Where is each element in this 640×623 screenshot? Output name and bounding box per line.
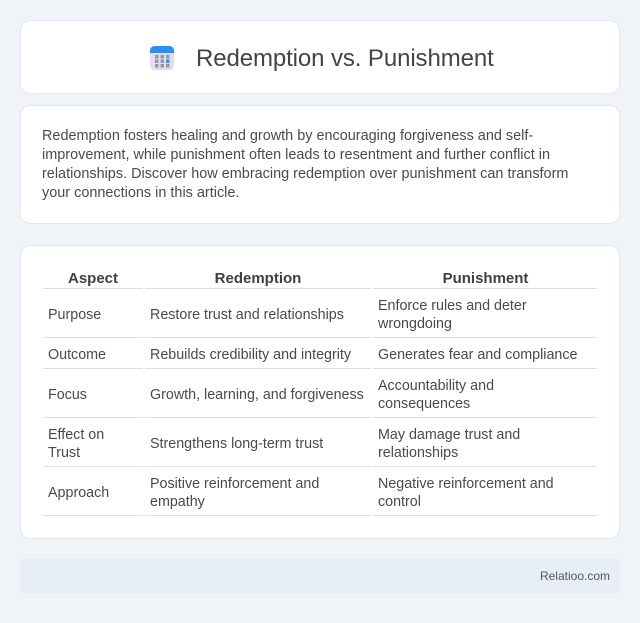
panel: description	[20, 105, 620, 224]
table row: Effect on Trust: Trust	[48, 445, 80, 461]
text block: introduction: improvement, while punishment often leads to resentment and further conflict in	[42, 147, 550, 163]
column heading: Aspect: Aspect	[68, 270, 118, 287]
footer credit: Relatioo.com	[540, 569, 610, 583]
table row: Purpose: Purpose	[48, 307, 101, 323]
table row: Focus: Growth, learning, and forgiveness	[150, 387, 364, 403]
table row: Effect on Trust	[43, 427, 597, 467]
table row: Purpose: Enforce rules and deter	[378, 298, 527, 314]
table row: Effect on Trust: Effect on	[48, 427, 104, 443]
table row: Effect on Trust: relationships	[378, 445, 458, 461]
table row: Focus	[43, 378, 597, 418]
table row: Approach: Approach	[48, 485, 109, 501]
text block: introduction: your connections in this article.	[42, 185, 239, 201]
table row: Purpose: Restore trust and relationships	[150, 307, 344, 323]
table row: Effect on Trust: Strengthens long-term trust	[150, 436, 323, 452]
table row: Focus: Focus	[48, 387, 87, 403]
footer	[20, 559, 620, 593]
table row: Approach: Positive reinforcement and	[150, 476, 319, 492]
table row: Approach: control	[378, 494, 421, 510]
table row: Approach	[43, 476, 597, 516]
column heading: Punishment: Punishment	[443, 270, 528, 287]
table row: Outcome: Outcome	[48, 347, 106, 363]
text block: introduction: Redemption fosters healing and growth by encouraging forgiveness and self-	[42, 128, 533, 144]
table row: Approach: empathy	[150, 494, 205, 510]
panel: header	[20, 20, 620, 94]
panel: comparison table	[20, 245, 620, 539]
table row: Approach: Negative reinforcement and	[378, 476, 554, 492]
text block: introduction: relationships. Discover how embracing redemption over punishment can transform	[42, 166, 568, 182]
table row: Outcome	[43, 347, 597, 369]
table row: Outcome: Rebuilds credibility and integrity	[150, 347, 351, 363]
column heading: Redemption: Redemption	[215, 270, 301, 287]
title: Redemption vs. Punishment	[196, 45, 494, 72]
table row: Outcome: Generates fear and compliance	[378, 347, 577, 363]
table header row	[43, 270, 597, 289]
table row: Focus: Accountability and	[378, 378, 494, 394]
table row: Purpose	[43, 298, 597, 338]
table row: Purpose: wrongdoing	[378, 316, 452, 332]
table row: Effect on Trust: May damage trust and	[378, 427, 520, 443]
icon: calendar	[150, 46, 174, 70]
table row: Focus: consequences	[378, 396, 470, 412]
text block: introduction	[42, 128, 568, 201]
